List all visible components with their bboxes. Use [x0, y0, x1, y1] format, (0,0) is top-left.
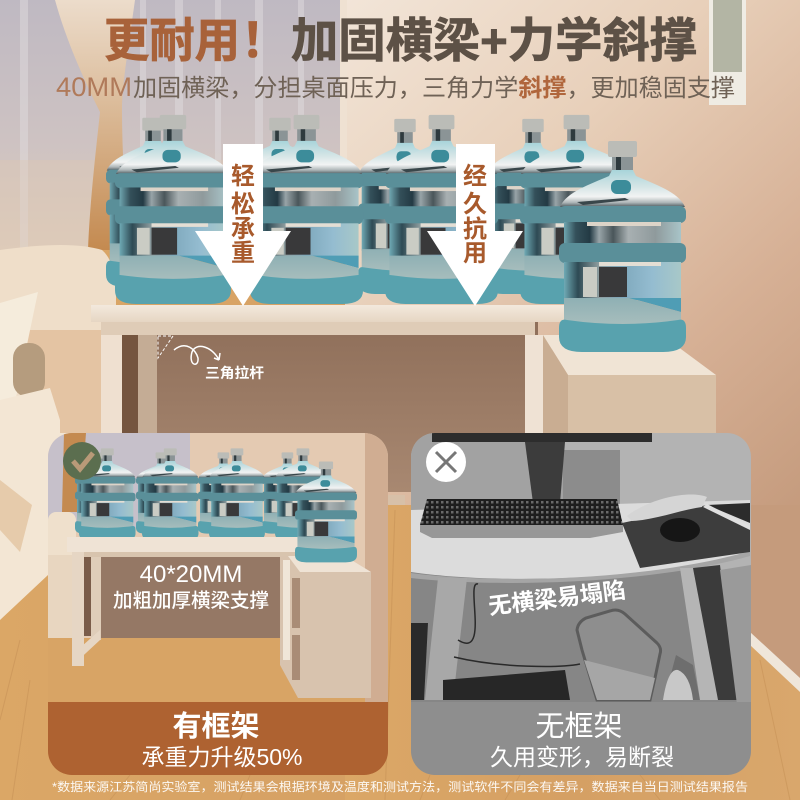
- picture frame: [709, 0, 746, 105]
- arrow: 轻松承重: [195, 144, 291, 306]
- mini bottles: [75, 448, 331, 540]
- icon: check: [63, 442, 101, 480]
- title: 更耐用: [104, 14, 240, 67]
- arrow: 经久抗用: 久: [463, 191, 487, 218]
- icon: cross: [426, 442, 466, 482]
- triangle brace callout: 三角拉杆: [205, 365, 264, 381]
- subtitle: 40MM: [56, 72, 132, 102]
- arrow: 轻松承重: 轻: [231, 163, 255, 190]
- arrow: 轻松承重: 松: [231, 191, 255, 218]
- curtain: [55, 0, 135, 250]
- caption subtitle: 久用变形，易断裂: [490, 744, 674, 770]
- arrow: 轻松承重: 承: [231, 216, 255, 243]
- panel: without frame: [411, 433, 751, 775]
- side cabinet: [543, 335, 716, 435]
- title: 加固横梁+力学斜撑: [291, 14, 697, 67]
- mini room photo: [48, 433, 388, 705]
- caption subtitle: 承重力升级50%: [141, 744, 303, 770]
- caption bar: [48, 702, 388, 775]
- panel: with frame: [48, 433, 388, 775]
- front row water bottles: [115, 115, 686, 352]
- arrow: 轻松承重: 重: [231, 240, 255, 267]
- triangle brace callout: [158, 336, 264, 381]
- footnote: *数据来源江苏简尚实验室，测试结果会根据环境及温度和测试方法，测试软件不同会有差异，数据来自当日测试结果报告: [52, 779, 748, 794]
- arrow: 经久抗用: [427, 144, 523, 306]
- under-table wall: [123, 322, 538, 492]
- sofa: [0, 245, 116, 440]
- grayscale desk photo: [411, 433, 751, 705]
- desk with crossbeam: [91, 305, 569, 437]
- mini desk: [67, 537, 309, 666]
- subtitle: 加固横梁，分担桌面压力，三角力学斜撑，更加稳固支撑: [133, 75, 735, 102]
- back row water bottles: [106, 118, 580, 294]
- caption title: 无框架: [535, 710, 623, 743]
- caption bar: [411, 702, 751, 775]
- panel text: 40*20MM: 40*20MM: [140, 561, 242, 588]
- arrow: 经久抗用: 经: [463, 163, 487, 190]
- title: ！: [241, 14, 288, 67]
- mini cabinet: [280, 556, 371, 698]
- arrow: 经久抗用: 用: [463, 240, 487, 267]
- caption title: 有框架: [172, 710, 260, 743]
- panel text: reinforced crossbeam: 加粗加厚横梁支撑: [113, 590, 269, 612]
- wood floor grain: [0, 510, 790, 800]
- photo text: collapse warning: 无横梁易塌陷: [487, 577, 627, 619]
- arrow: 经久抗用: 抗: [463, 216, 487, 243]
- title: [104, 14, 697, 67]
